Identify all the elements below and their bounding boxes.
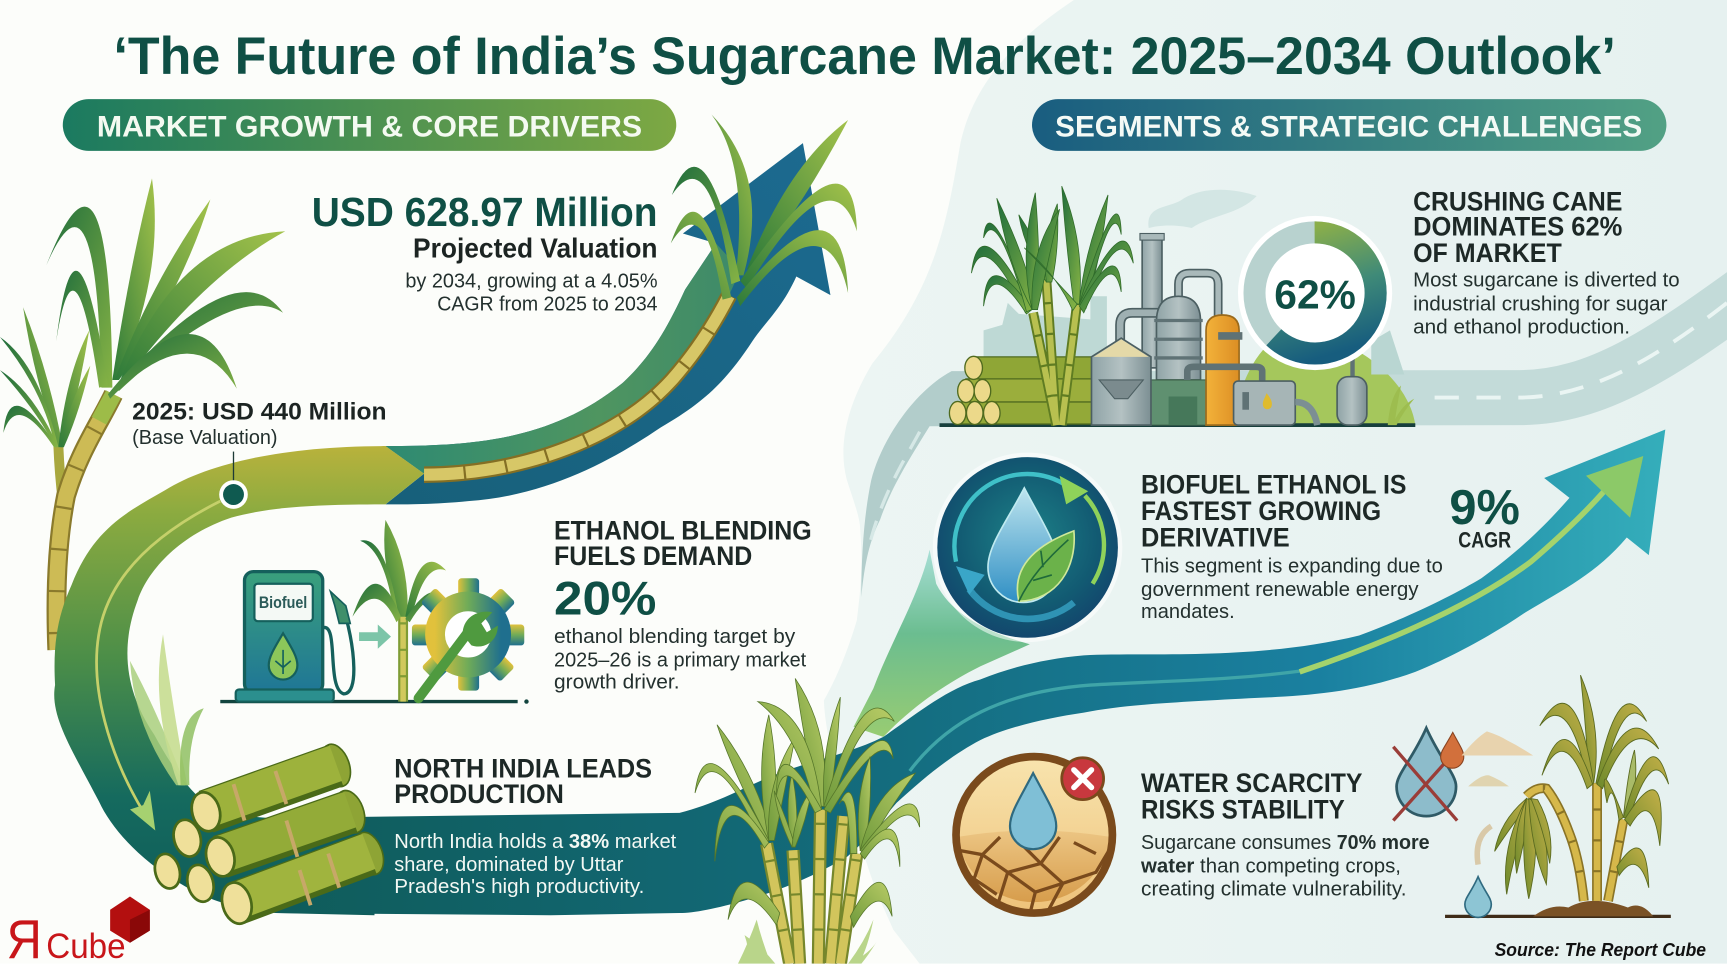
- logo: RCube: [7, 897, 150, 970]
- panel: biofuel ethanol text: FASTEST GROWING: [1141, 496, 1381, 526]
- callout: base valuation: 2025: USD 440 Million: [132, 399, 387, 426]
- heading pill: market growth: MARKET GROWTH & CORE DRIVERS: [97, 111, 642, 144]
- panel: biofuel ethanol text: government renewable energy: [1141, 579, 1419, 601]
- panel: valuation text: [312, 189, 658, 316]
- panel: north india text: share, dominated by Uttar: [394, 854, 624, 876]
- panel: ethanol blending text: ETHANOL BLENDING: [554, 516, 812, 546]
- icon: sugar factory scene: [939, 186, 1415, 425]
- panel: ethanol blending text: FUELS DEMAND: [554, 541, 752, 571]
- panel: water scarcity text: WATER SCARCITY: [1141, 768, 1363, 798]
- panel: crushing cane text: and ethanol production.: [1413, 317, 1630, 339]
- panel: valuation text: USD 628.97 Million: [312, 189, 658, 235]
- panel: crushing cane text: Most sugarcane is diverted to: [1413, 269, 1680, 291]
- stat: 9% CAGR: CAGR: [1458, 527, 1511, 552]
- icon: biofuel pump, cane and gear: [220, 520, 529, 704]
- panel: valuation text: by 2034, growing at a 4.05%: [405, 270, 658, 292]
- icon: small cane far left: [0, 307, 90, 501]
- icon: biofuel globe with drop and leaf: [933, 453, 1122, 642]
- bottom white strip: [0, 964, 1727, 975]
- panel: crushing cane text: CRUSHING CANE: [1413, 186, 1622, 216]
- source note: Source: The Report Cube: [1495, 940, 1706, 960]
- panel: ethanol blending text: growth driver.: [554, 671, 680, 693]
- title: ‘The Future of India’s Sugarcane Market: 2025–2034 Outlook’: [113, 27, 1616, 86]
- heading pill: segments: [1032, 99, 1666, 151]
- panel: north india text: Pradesh's high productivity.: [394, 876, 644, 898]
- panel: valuation text: Projected Valuation: [413, 233, 658, 264]
- logo: RCube: Я: [7, 908, 42, 970]
- donut chart: 62%: 62%: [1274, 271, 1356, 317]
- icon: dry soil circle with drop: [956, 757, 1112, 914]
- panel: north india text: North India holds a 38% market: [394, 831, 677, 853]
- panel: valuation text: CAGR from 2025 to 2034: [437, 294, 658, 316]
- icon: pale grass: [130, 634, 204, 785]
- panel: crushing cane text: industrial crushing for sugar: [1413, 294, 1668, 316]
- arrow: upper growth ribbon: [385, 143, 830, 504]
- panel: crushing cane text: [1413, 186, 1680, 339]
- panel: ethanol blending text: 20%: [554, 573, 656, 626]
- panel: biofuel ethanol text: BIOFUEL ETHANOL IS: [1141, 469, 1406, 499]
- icon: crossed-out water drop: [1393, 728, 1533, 821]
- panel: north india text: NORTH INDIA LEADS: [394, 754, 652, 784]
- panel: water scarcity text: creating climate vulnerability.: [1141, 878, 1406, 900]
- road: [861, 289, 1727, 597]
- panel: biofuel ethanol text: [1141, 469, 1443, 623]
- panel: water scarcity text: RISKS STABILITY: [1141, 794, 1345, 824]
- icon: biofuel pump, cane and gear: Biofuel: [259, 593, 307, 612]
- panel: crushing cane text: OF MARKET: [1413, 238, 1562, 268]
- panel: ethanol blending text: [554, 516, 812, 693]
- callout: base valuation: [132, 399, 387, 509]
- arrow: lower ribbon to arrowhead: [275, 430, 1665, 915]
- callout: base valuation: (Base Valuation): [132, 427, 278, 449]
- panel: north india text: [394, 754, 677, 898]
- heading pill: market growth: [63, 99, 676, 151]
- arrow: green growth arc: [54, 446, 424, 915]
- panel: north india text: PRODUCTION: [394, 779, 564, 809]
- panel: biofuel ethanol text: mandates.: [1141, 601, 1235, 623]
- panel: crushing cane text: DOMINATES 62%: [1413, 212, 1622, 242]
- donut chart: 62%: [1238, 216, 1392, 370]
- icon: cane on arrow: [671, 115, 857, 306]
- panel: ethanol blending text: ethanol blending target by: [554, 626, 796, 648]
- panel: water scarcity text: Sugarcane consumes 70% more: [1141, 832, 1430, 854]
- shape: light cone from biofuel icon: [854, 550, 1030, 737]
- panel: water scarcity text: [1140, 768, 1430, 900]
- icon: log pile: [151, 740, 389, 927]
- panel: ethanol blending text: 2025–26 is a primary market: [554, 649, 807, 671]
- logo: RCube: Cube: [46, 927, 126, 966]
- icon: wilted cane: [1445, 675, 1671, 917]
- icon: central cane cluster: [695, 678, 920, 964]
- panel: biofuel ethanol text: This segment is expanding due to: [1141, 556, 1443, 578]
- panel: biofuel ethanol text: DERIVATIVE: [1141, 522, 1290, 552]
- heading pill: segments: SEGMENTS & STRATEGIC CHALLENGES: [1055, 111, 1642, 144]
- panel: water scarcity text: water than competing crops,: [1140, 855, 1401, 877]
- icon: tall cane left: [46, 178, 285, 650]
- stat: 9% CAGR: 9%: [1449, 479, 1520, 535]
